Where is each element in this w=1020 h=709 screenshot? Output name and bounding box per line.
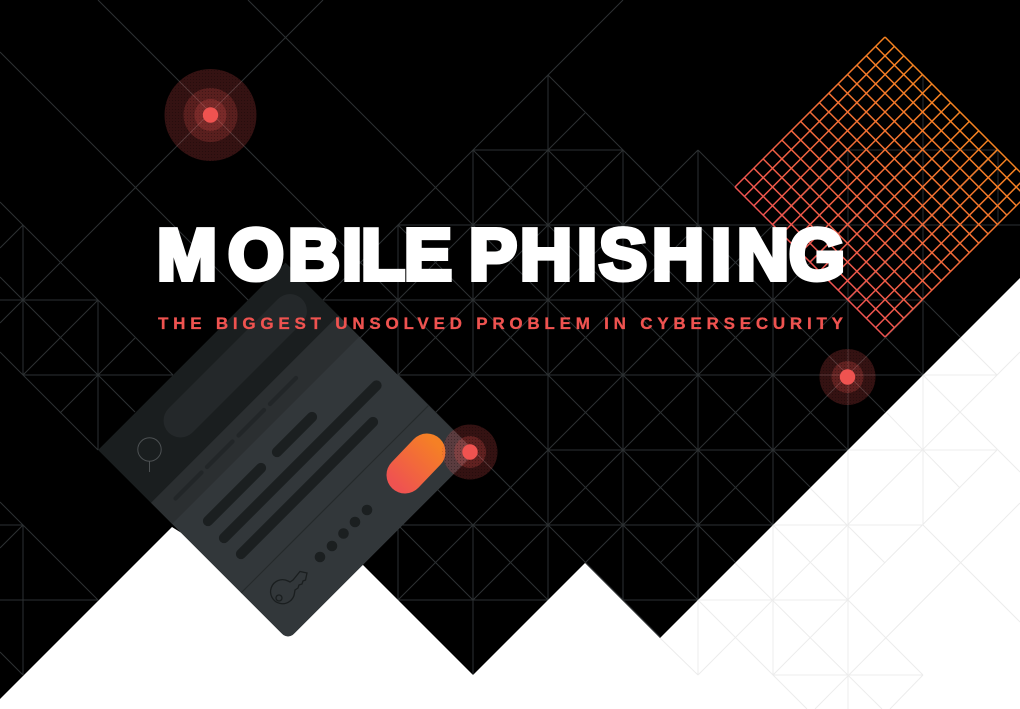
icon: signal pulse top left — [164, 69, 256, 161]
icon: key — [271, 572, 307, 604]
phone body — [98, 262, 476, 640]
orange wire mesh diamond — [735, 37, 1020, 337]
icon: search pin — [138, 438, 161, 472]
subtitle: THE BIGGEST UNSOLVED PROBLEM IN CYBERSECURITY — [158, 314, 844, 333]
panel: phone shown as a tilted login screen — [98, 262, 476, 640]
button: orange login pill — [405, 452, 427, 475]
white mountain shape — [0, 278, 1020, 709]
title: MOBILE PHISHING — [157, 216, 845, 296]
icon: signal pulse on phone — [442, 424, 498, 480]
light grid pattern on white — [660, 338, 1020, 709]
password dots — [315, 505, 372, 562]
icon: signal pulse right — [820, 349, 876, 405]
